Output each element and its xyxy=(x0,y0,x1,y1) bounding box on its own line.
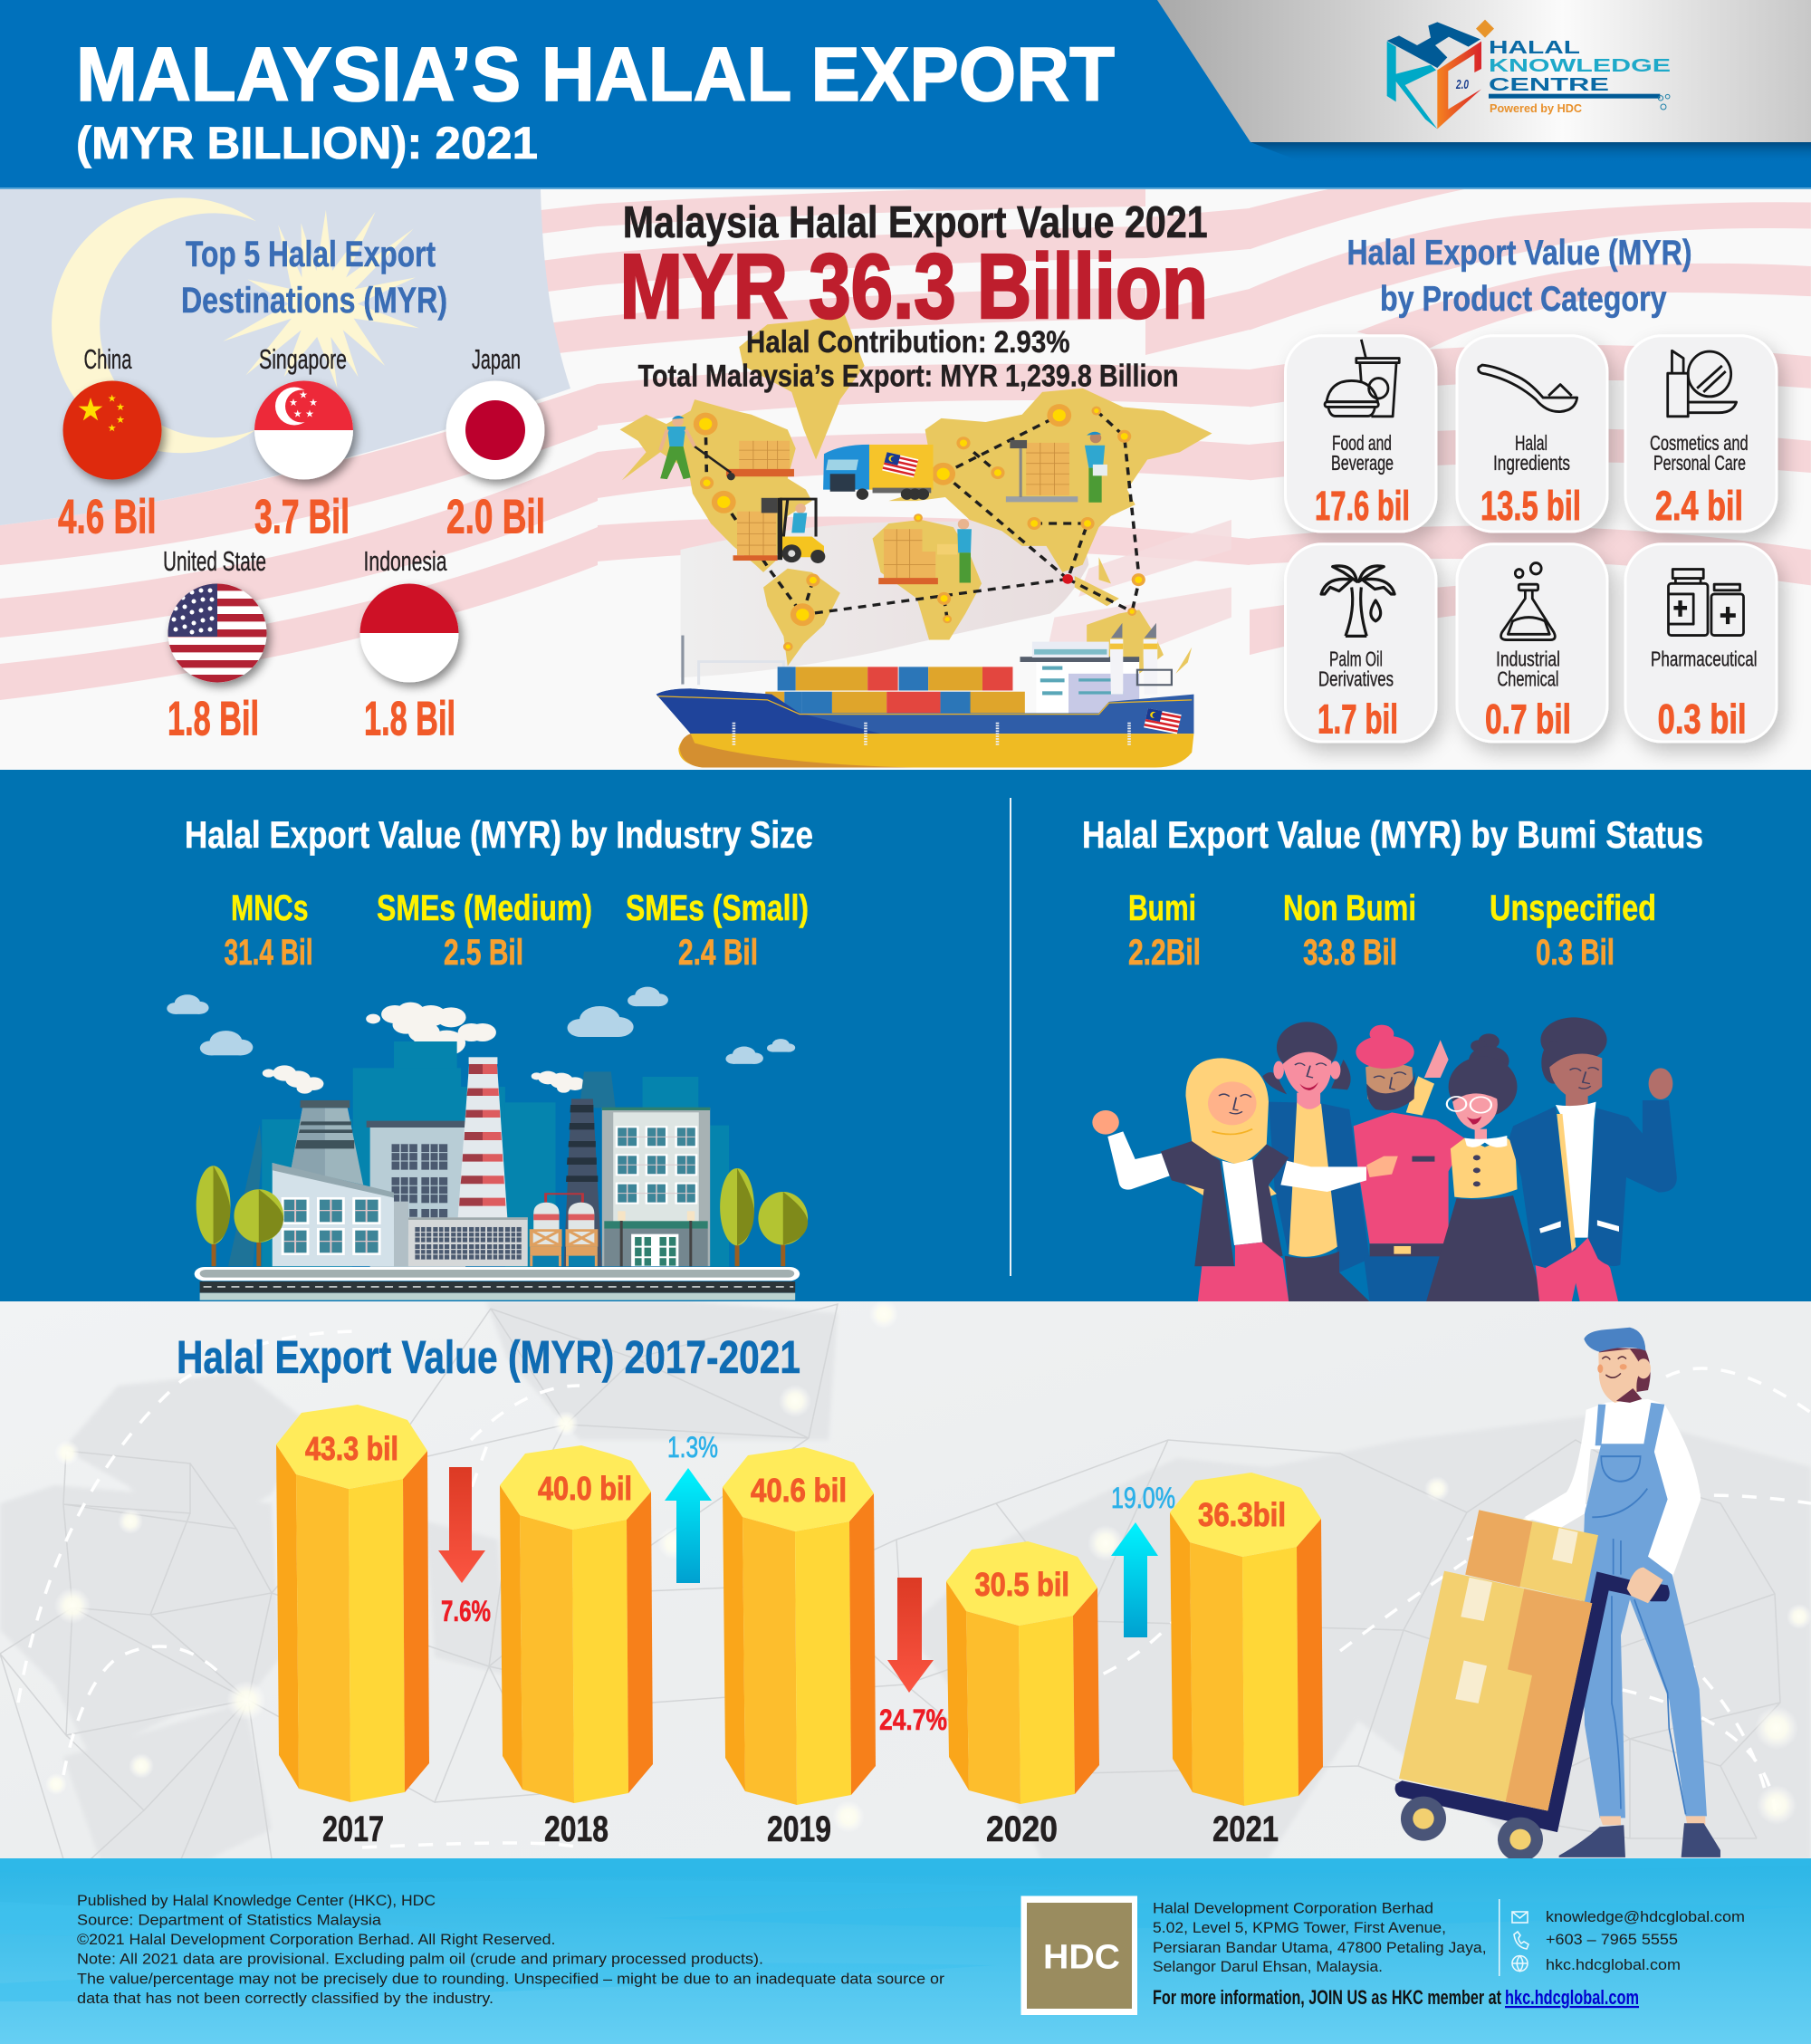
destination: Japan: 2.0 Bil xyxy=(446,490,545,543)
metric: Unspecified: Unspecified xyxy=(1490,888,1656,928)
heading: top 5 destinations xyxy=(181,235,447,321)
dashed route arcs xyxy=(18,1331,1811,1847)
panel: halal export 2017-2021 background xyxy=(0,1300,1811,1859)
publication notes: Source: Department of Statistics Malaysia xyxy=(77,1912,382,1929)
contact details xyxy=(1499,1899,1745,1976)
address: Halal Development Corporation Berhad xyxy=(1153,1900,1433,1916)
destination: Singapore xyxy=(254,343,354,543)
metric: SMEs small: SMEs (Small) xyxy=(626,888,809,928)
dark chimney xyxy=(564,1099,602,1266)
boxes xyxy=(1399,1510,1598,1810)
publication notes: Note: All 2021 data are provisional. Excluding palm oil (crude and primary processed products). xyxy=(77,1950,763,1967)
panel: flag background xyxy=(0,189,1811,700)
world map background xyxy=(0,1301,1811,1859)
warehouse scale and worker xyxy=(1006,432,1107,503)
head and cap xyxy=(1584,1328,1651,1403)
canton xyxy=(0,189,570,525)
card: cosmetics and personal care: Cosmetics and xyxy=(1650,431,1749,455)
card: industrial chemical: Industrial xyxy=(1496,647,1560,670)
subtitle: (MYR BILLION): 2021 xyxy=(76,118,538,168)
illustration: world map logistics and ship xyxy=(620,313,1212,767)
world map xyxy=(620,313,1212,674)
logo: Halal Knowledge Centre: 2.0 xyxy=(1455,77,1469,92)
heading: product category: Halal Export Value (MYR) xyxy=(1347,234,1691,273)
hand on trolley handle xyxy=(1627,1568,1663,1603)
address: 5.02, Level 5, KPMG Tower, First Avenue, xyxy=(1153,1919,1446,1936)
destination: United State: 1.8 Bil xyxy=(168,692,259,745)
metric: Non Bumi: Non Bumi xyxy=(1283,888,1416,928)
man in yellow shirt with blue vest xyxy=(1262,1022,1370,1301)
destination: China: 4.6 Bil xyxy=(58,490,157,543)
column: 2019: 40.6 bil xyxy=(751,1472,847,1509)
HDC logo xyxy=(1021,1896,1137,2015)
logo: Halal Knowledge Centre: CENTRE xyxy=(1489,75,1609,95)
logo: Halal Knowledge Centre: Powered by HDC xyxy=(1490,101,1583,115)
column: 2017: 43.3 bil xyxy=(305,1430,398,1467)
arrow: down 24.7% xyxy=(879,1578,947,1736)
column: 2018: 40.0 bil xyxy=(538,1470,632,1507)
card: food and beverage: 17.6 bil xyxy=(1315,483,1410,529)
metric: Non Bumi xyxy=(1283,888,1416,973)
column: 2017: 2017 xyxy=(322,1809,384,1849)
heading: industry size: Halal Export Value (MYR) by Industry Size xyxy=(185,813,813,856)
card: palm oil derivatives: 1.7 bil xyxy=(1318,696,1398,742)
logo: Halal Knowledge Centre xyxy=(1387,20,1671,129)
contact details: knowledge@hdcglobal.com xyxy=(1546,1908,1745,1925)
logo: Halal Knowledge Centre: HALAL xyxy=(1489,38,1580,58)
heading: product category xyxy=(1347,234,1691,319)
column: 2021: 2021 xyxy=(1212,1809,1279,1849)
card: industrial chemical xyxy=(1457,544,1607,742)
mid building xyxy=(367,1121,465,1267)
heading: product category: by Product Category xyxy=(1380,280,1667,319)
clouds xyxy=(167,987,795,1064)
total export: Total Malaysia’s Export: MYR 1,239.8 Billion xyxy=(638,360,1179,394)
column: 2017 xyxy=(276,1405,429,1849)
metric: MNCs: 31.4 Bil xyxy=(225,933,313,973)
metric: MNCs xyxy=(225,888,313,973)
contact details: hkc.hdcglobal.com xyxy=(1546,1956,1681,1973)
card: palm oil derivatives xyxy=(1286,544,1436,742)
metric: Bumi xyxy=(1128,888,1201,973)
address: Persiaran Bandar Utama, 47800 Petaling Jaya, xyxy=(1153,1939,1487,1956)
call to action: For more information, JOIN US as HKC member at xyxy=(1153,1986,1501,2009)
big number: MYR 36.3 Billion xyxy=(619,236,1208,338)
card: cosmetics and personal care: 2.4 bil xyxy=(1655,483,1743,529)
card: industrial chemical: 0.7 bil xyxy=(1485,696,1571,742)
column: 2019: 2019 xyxy=(767,1809,831,1849)
metric: SMEs medium: 2.5 Bil xyxy=(444,933,523,973)
destination: Japan: Japan xyxy=(472,343,521,375)
heading: top 5 destinations: Destinations (MYR) xyxy=(181,281,447,321)
woman in hijab xyxy=(1092,1058,1398,1301)
destination: United State xyxy=(163,545,267,745)
card: industrial chemical: Chemical xyxy=(1498,667,1559,690)
panel: product categories xyxy=(1286,234,1777,742)
route lines xyxy=(705,411,1139,619)
trees xyxy=(196,1166,808,1266)
arrow: up 19.0% xyxy=(1111,1482,1175,1637)
network lines xyxy=(0,1304,1780,1859)
metric: SMEs medium xyxy=(377,888,592,973)
map pins xyxy=(694,404,1145,651)
publication notes xyxy=(77,1892,944,2007)
card: pharmaceutical xyxy=(1625,544,1777,742)
publication notes: The value/percentage may not be precisely due to rounding. Unspecified – might be due to an inadequate data source or xyxy=(77,1971,944,1988)
publication notes: Published by Halal Knowledge Center (HKC), HDC xyxy=(77,1892,436,1909)
column: 2020: 30.5 bil xyxy=(974,1566,1069,1603)
background city xyxy=(228,1041,729,1267)
card: pharmaceutical: 0.3 bil xyxy=(1658,696,1747,742)
heading: export value: Malaysia Halal Export Value 2021 xyxy=(623,198,1208,247)
red chimney xyxy=(458,1057,507,1218)
metric: Bumi: 2.2Bil xyxy=(1128,933,1201,973)
heading: 2017-2021: Halal Export Value (MYR) 2017-2021 xyxy=(177,1331,800,1383)
arrow: up 1.3% xyxy=(665,1431,718,1583)
address: Selangor Darul Ehsan, Malaysia. xyxy=(1153,1958,1383,1975)
card: palm oil derivatives: Derivatives xyxy=(1318,667,1394,690)
card: halal ingredients: Halal xyxy=(1515,431,1547,455)
publication notes: ©2021 Halal Development Corporation Berhad. All Right Reserved. xyxy=(77,1931,556,1948)
illustration: factory xyxy=(167,987,808,1300)
arrow: down 7.6% xyxy=(438,1467,491,1627)
storage tanks xyxy=(530,1194,598,1266)
address xyxy=(1153,1900,1487,1975)
card: cosmetics and personal care xyxy=(1625,336,1777,532)
metric: MNCs: MNCs xyxy=(231,888,308,928)
glowing nodes xyxy=(45,1300,1811,1833)
card: palm oil derivatives: Palm Oil xyxy=(1329,647,1383,670)
destination: Indonesia: 1.8 Bil xyxy=(364,692,455,745)
metric: Non Bumi: 33.8 Bil xyxy=(1303,933,1397,973)
column: 2021: 36.3bil xyxy=(1198,1496,1286,1533)
container ship xyxy=(656,623,1193,767)
metric: Unspecified: 0.3 Bil xyxy=(1536,933,1615,973)
destination: Indonesia xyxy=(359,545,459,745)
column: 2018 xyxy=(500,1445,653,1849)
metric: Bumi: Bumi xyxy=(1128,888,1196,928)
arrow: up 1.3%: 1.3% xyxy=(667,1431,718,1463)
arrow: up 19.0%: 19.0% xyxy=(1111,1482,1175,1514)
woman with glasses xyxy=(1426,1033,1544,1301)
halal contribution: Halal Contribution: 2.93% xyxy=(746,325,1070,360)
column: 2020 xyxy=(946,1541,1099,1849)
heading: bumi status: Halal Export Value (MYR) by Bumi Status xyxy=(1082,813,1703,856)
title: MALAYSIA’S HALAL EXPORT xyxy=(76,32,1115,117)
panel: top 5 destinations xyxy=(58,235,545,745)
card: halal ingredients: Ingredients xyxy=(1493,451,1570,475)
logo: Halal Knowledge Centre: KNOWLEDGE xyxy=(1489,56,1671,76)
contact details: +603 – 7965 5555 xyxy=(1546,1931,1678,1948)
card: food and beverage xyxy=(1286,336,1436,532)
column: 2018: 2018 xyxy=(544,1809,608,1849)
destination: Singapore: Singapore xyxy=(259,343,347,375)
arrow: down 24.7%: 24.7% xyxy=(879,1703,947,1736)
destination: United State: United State xyxy=(163,545,266,577)
panel: footer xyxy=(0,1858,1811,2044)
metric: SMEs medium: SMEs (Medium) xyxy=(377,888,592,928)
HDC logo: HDC xyxy=(1043,1939,1120,1977)
panel: header xyxy=(0,0,1811,189)
card: food and beverage: Beverage xyxy=(1331,451,1394,475)
man with turban xyxy=(1354,1025,1467,1301)
card: pharmaceutical: Pharmaceutical xyxy=(1651,647,1757,670)
card: food and beverage: Food and xyxy=(1332,431,1392,455)
publication notes: data that has not been correctly classified by the industry. xyxy=(77,1990,493,2007)
metric: Unspecified xyxy=(1490,888,1656,973)
panel: central headline xyxy=(619,198,1208,394)
low building xyxy=(408,1217,528,1266)
grey chimney xyxy=(292,1100,363,1185)
tall building xyxy=(602,1108,710,1266)
worker body xyxy=(1524,1399,1720,1857)
smoke xyxy=(263,1003,585,1094)
panel: industry size xyxy=(167,813,813,1300)
panel: export chart xyxy=(177,1331,1323,1849)
card: cosmetics and personal care: Personal Care xyxy=(1653,451,1746,475)
destination: Indonesia: Indonesia xyxy=(364,545,447,577)
illustration: group of people xyxy=(1092,1017,1677,1301)
column: 2021 xyxy=(1170,1473,1323,1849)
forklift xyxy=(733,498,825,563)
destination: Singapore: 3.7 Bil xyxy=(254,490,350,543)
arrow: down 7.6%: 7.6% xyxy=(441,1595,491,1627)
man in blue jacket xyxy=(1509,1017,1677,1301)
destination: Japan xyxy=(446,343,545,543)
illustration: delivery worker with trolley xyxy=(1395,1328,1720,1862)
boxes and worker xyxy=(878,519,972,584)
card: halal ingredients: 13.5 bil xyxy=(1480,483,1581,529)
trolley xyxy=(1395,1571,1670,1862)
road base xyxy=(195,1267,800,1300)
destination: China: China xyxy=(83,343,132,375)
panel: industry size and bumi status background xyxy=(0,770,1811,1301)
card: halal ingredients xyxy=(1457,336,1607,532)
metric: SMEs small: 2.4 Bil xyxy=(678,933,758,973)
metric: SMEs small xyxy=(626,888,809,973)
column: 2019 xyxy=(723,1447,876,1849)
heading: top 5 destinations: Top 5 Halal Export xyxy=(186,235,436,274)
column: 2020: 2020 xyxy=(986,1809,1058,1849)
truck xyxy=(823,445,934,500)
crescent and star xyxy=(52,197,419,453)
destination: China xyxy=(58,343,161,543)
panel: bumi status xyxy=(1082,813,1703,1301)
call to action: hkc.hdcglobal.com xyxy=(1505,1986,1639,2009)
worker with pallet jack xyxy=(660,416,794,480)
shed building xyxy=(273,1163,408,1266)
